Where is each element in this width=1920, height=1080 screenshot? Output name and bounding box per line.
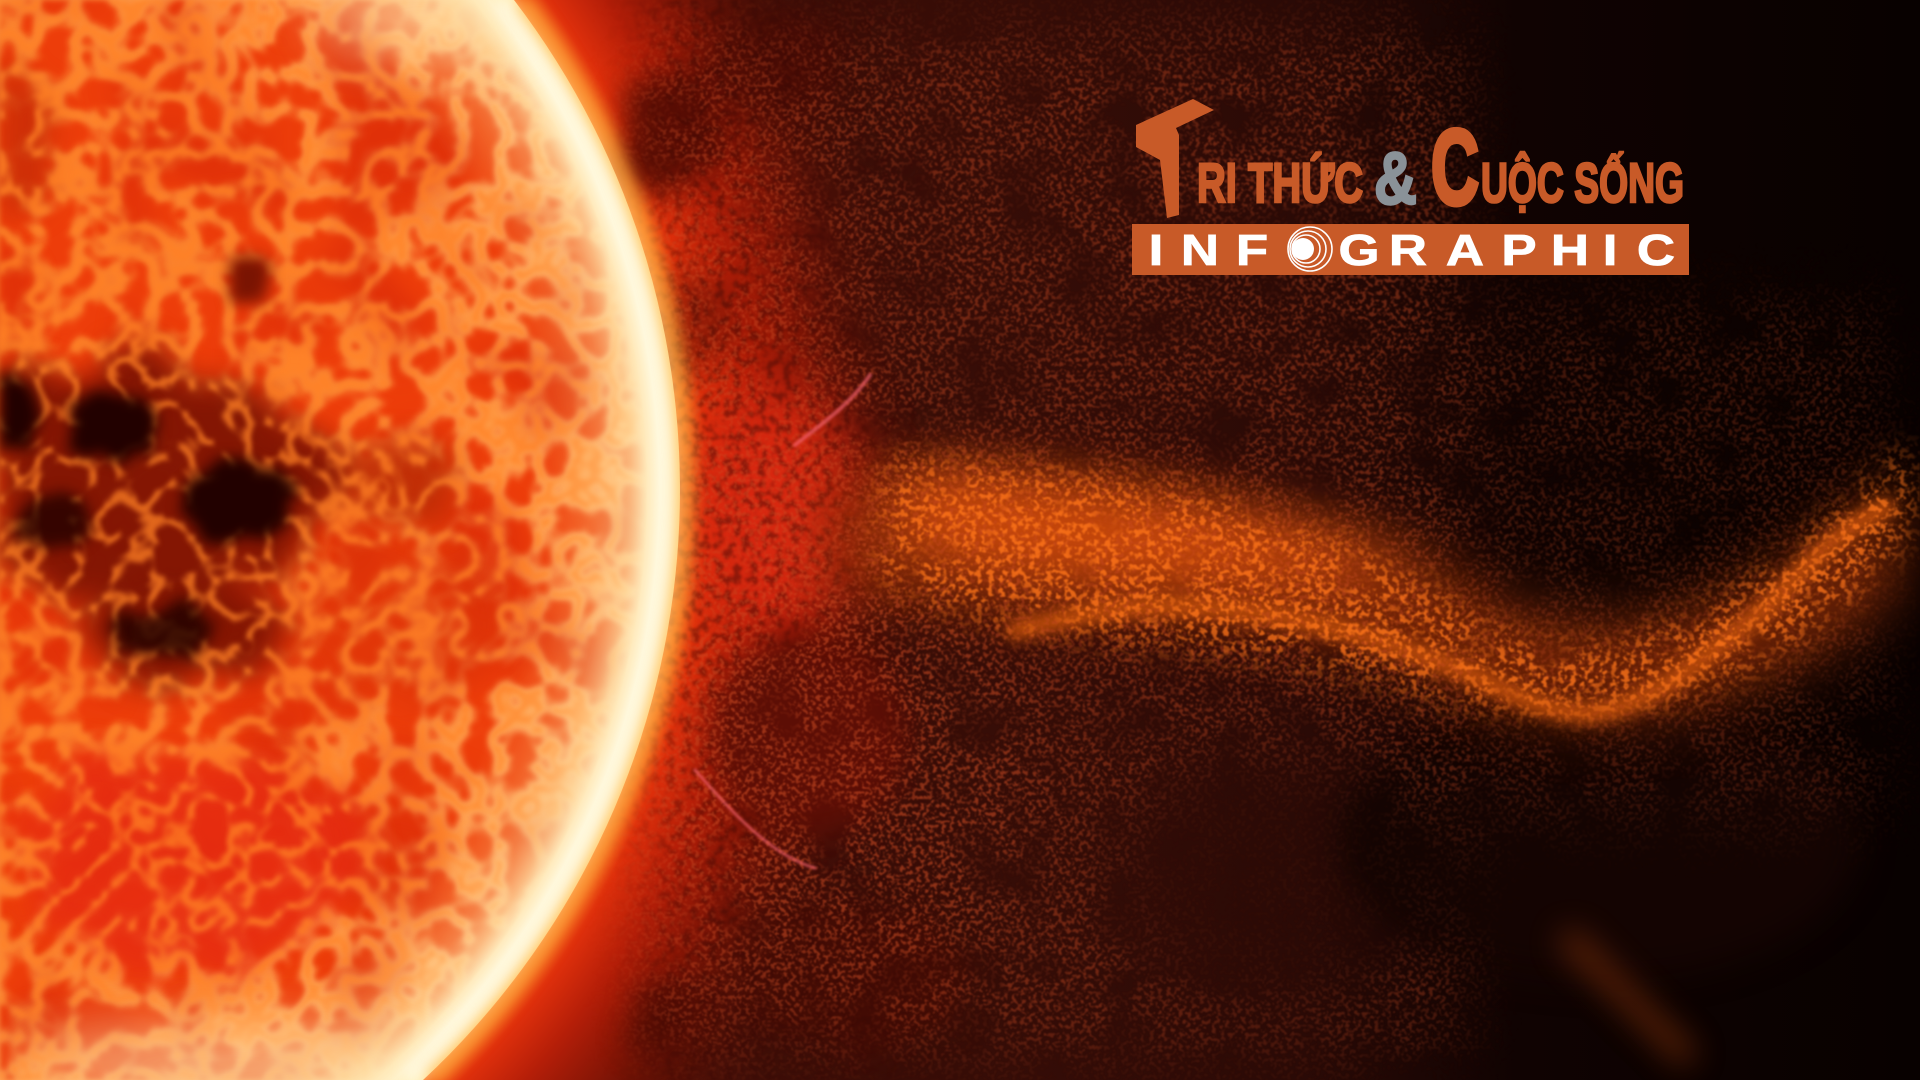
infographic banner: GRAPHIC xyxy=(1338,226,1675,275)
logo text: ri thức: RI THỨC xyxy=(1197,151,1363,214)
limb highlight xyxy=(408,0,670,1080)
logo text: uộc sống: UỘC SỐNG xyxy=(1481,151,1684,214)
infographic banner: INF xyxy=(1149,226,1268,275)
icon: sun rings as letter O xyxy=(1288,227,1332,271)
corona dark speckle xyxy=(627,0,888,1074)
faint streak at bottom right xyxy=(1565,935,1690,1060)
logo letter T xyxy=(1136,99,1214,218)
corona: red glow around the sun xyxy=(400,0,1020,1080)
dark plasma lump below the flare xyxy=(710,635,1860,980)
logo ampersand: & xyxy=(1374,137,1417,220)
particle cloud xyxy=(626,0,1906,1079)
red lower hemisphere xyxy=(0,60,510,970)
hot particles along the stream xyxy=(860,430,1920,738)
limb outer glow xyxy=(431,0,685,1080)
logo letter C: C xyxy=(1431,107,1479,227)
infographic banner xyxy=(1132,224,1689,275)
sunspots xyxy=(0,256,293,656)
cream glow at top and bottom of the disc xyxy=(20,0,530,1080)
light veins xyxy=(0,0,700,1080)
dark band xyxy=(0,365,460,680)
logo: Tri thức & Cuộc sống Infographic xyxy=(1132,99,1689,275)
sun disc xyxy=(0,0,700,1080)
solar flare stream xyxy=(830,470,1900,716)
pink prominence arcs xyxy=(695,375,870,868)
